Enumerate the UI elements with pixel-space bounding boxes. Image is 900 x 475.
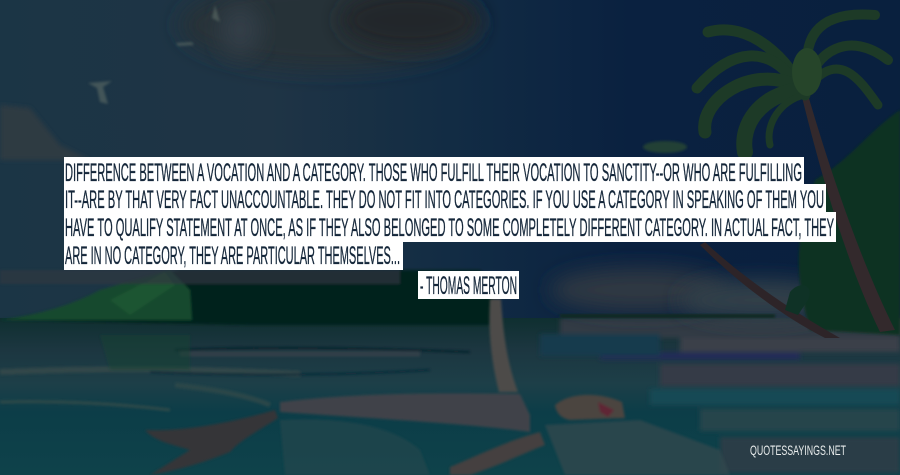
watermark: QUOTESSAYINGS.NET (750, 442, 846, 458)
background: night sky (0, 0, 900, 320)
quote poster: - THOMAS MERTON (420, 272, 517, 300)
background: sea (0, 318, 900, 475)
attribution (418, 271, 519, 300)
icon: seabirds (88, 5, 220, 104)
background: green island (0, 270, 493, 370)
background: distant shore and clouds (550, 268, 840, 320)
quote line highlight bands (64, 157, 836, 270)
icon: palm trees and foliage (643, 14, 900, 338)
quote text lines: ARE IN NO CATEGORY, THEY ARE PARTICULAR THEMSELVES... (65, 242, 400, 270)
quote text block (64, 157, 836, 270)
background: floating woman (145, 299, 730, 475)
quote text lines (65, 159, 834, 270)
